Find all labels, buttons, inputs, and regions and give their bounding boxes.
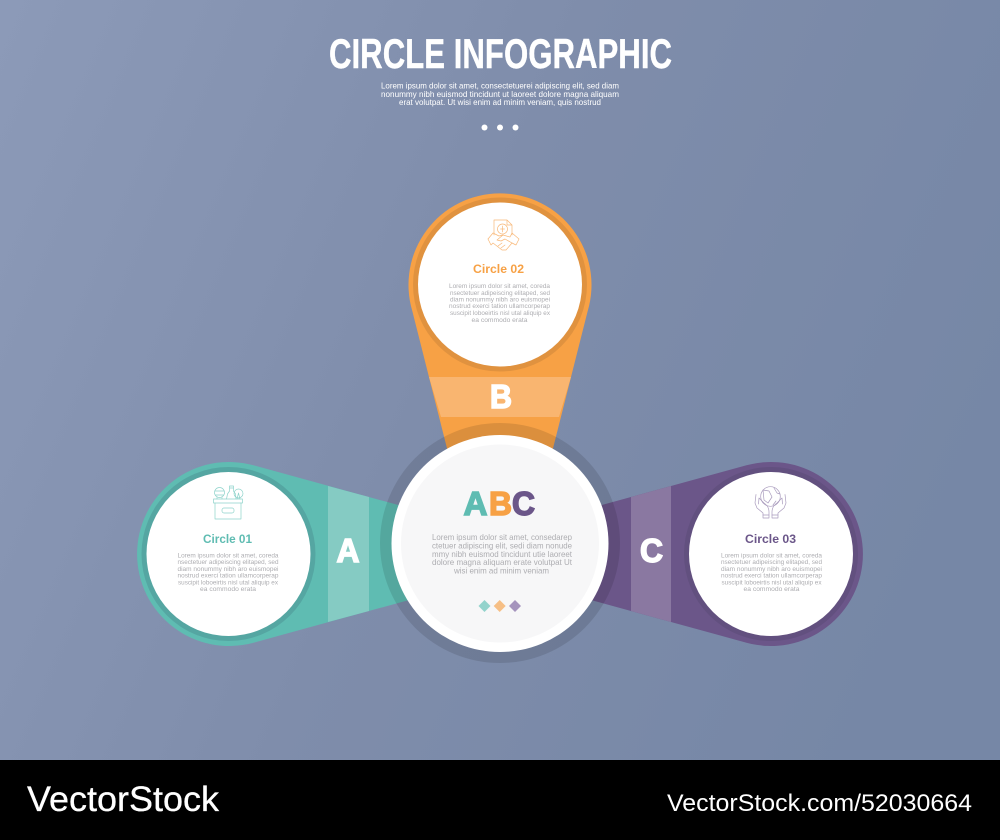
icon: handshake with document [488, 220, 519, 250]
center description: wisi enim ad minim veniam [453, 566, 549, 576]
diamonds [478, 600, 521, 612]
ABC logo: A [464, 485, 488, 522]
ring [142, 467, 316, 641]
text block: circle 01 [178, 552, 279, 593]
white disc [689, 472, 853, 636]
header description: Lorem ipsum dolor sit amet, consectetuerei adipiscing elit, sed diam [381, 80, 619, 90]
text block: circle 01: Lorem ipsum dolor sit amet, coreda [178, 552, 279, 560]
icon: hands holding globe [755, 487, 786, 518]
panel: circle 03 (purple, C) [580, 462, 863, 646]
footer id text: VectorStock.com/52030664 [667, 790, 972, 817]
text block: circle 01: diam nonummy nibh aro euismopei [178, 566, 278, 573]
halo [380, 423, 620, 663]
band A [328, 486, 369, 622]
text block: circle 02: Lorem ipsum dolor sit amet, coreda [449, 283, 550, 290]
heading: circle 01: Circle 01 [203, 532, 252, 546]
band C [631, 486, 671, 622]
text block: circle 03: nsectetuer adipeiscing elitaped, sed [721, 559, 822, 566]
footer logo text: VectorStock [27, 780, 220, 819]
header dots [482, 124, 518, 130]
text block: circle 02 [449, 283, 551, 324]
band B [429, 377, 571, 417]
title: CIRCLE INFOGRAPHIC [329, 30, 672, 77]
text block: circle 01: nsectetuer adipeiscing elitaped, sed [178, 559, 279, 566]
header description: nonummy nibh euismod tincidunt ut laoreet dolore magna aliquam [381, 89, 619, 99]
center description: dolore magna aliquam erate volutpat Ut [432, 557, 573, 567]
panel: circle 02 (orange, B) [408, 193, 592, 480]
white disc [418, 202, 582, 366]
purple arm [580, 462, 863, 646]
footer bar [0, 760, 1000, 840]
white disc [392, 435, 608, 652]
ABC logo: C [512, 485, 535, 522]
header description [381, 80, 619, 107]
panel: circle 01 (teal, A) [137, 462, 420, 646]
center description [432, 532, 573, 576]
letter A: A [336, 532, 360, 569]
text block: circle 01: suscipit loboeirtis nisl utal aliquip ex [178, 580, 279, 586]
inner grey disc [401, 444, 599, 642]
panel: center circle [380, 423, 620, 663]
text block: circle 02: diam nonummy nibh aro euismopei [450, 296, 550, 304]
center description: ctetuer adipiscing elit, sedi diam nonude [432, 540, 572, 550]
heading: circle 02: Circle 02 [473, 262, 524, 276]
text block: circle 03 [721, 552, 822, 593]
letter B: B [490, 378, 512, 415]
icon: box of items [214, 486, 243, 519]
text block: circle 03: nostrud exerci tation ullamcorperap [721, 573, 822, 580]
text block: circle 03: Lorem ipsum dolor sit amet, coreda [721, 552, 822, 560]
teal arm [137, 462, 420, 646]
text block: circle 03: suscipit loboeirtis nisl utal aliquip ex [722, 580, 822, 586]
text block: circle 02: nsectetuer adipeiscing elitaped, sed [450, 290, 550, 297]
ring [684, 467, 858, 641]
letter C: C [640, 532, 663, 569]
text block: circle 01: nostrud exerci tation ullamcorperap [178, 573, 279, 580]
text block: circle 02: ea commodo erata [472, 317, 528, 324]
ABC logo [464, 485, 535, 522]
text block: circle 03: ea commodo erata [744, 586, 800, 593]
white disc [146, 472, 310, 636]
text block: circle 01: ea commodo erata [200, 586, 256, 593]
ABC logo: B [489, 485, 512, 522]
text block: circle 02: nostrud exerci tation ullamcorperap [449, 303, 550, 310]
ring [413, 198, 587, 372]
text block: circle 03: diam nonummy nibh aro euismopei [721, 566, 822, 573]
header description: erat volutpat. Ut wisi enim ad minim veniam, quis nostrud [399, 97, 601, 107]
orange arm [408, 193, 592, 480]
heading: circle 03: Circle 03 [745, 532, 796, 546]
center description: mmy nibh euismod tincidunt utie laoreet [432, 549, 573, 559]
center description: Lorem ipsum dolor sit amet, consedarep [432, 532, 572, 542]
text block: circle 02: suscipit loboeirtis nisl utal aliquip ex [450, 310, 551, 317]
header [329, 30, 672, 130]
